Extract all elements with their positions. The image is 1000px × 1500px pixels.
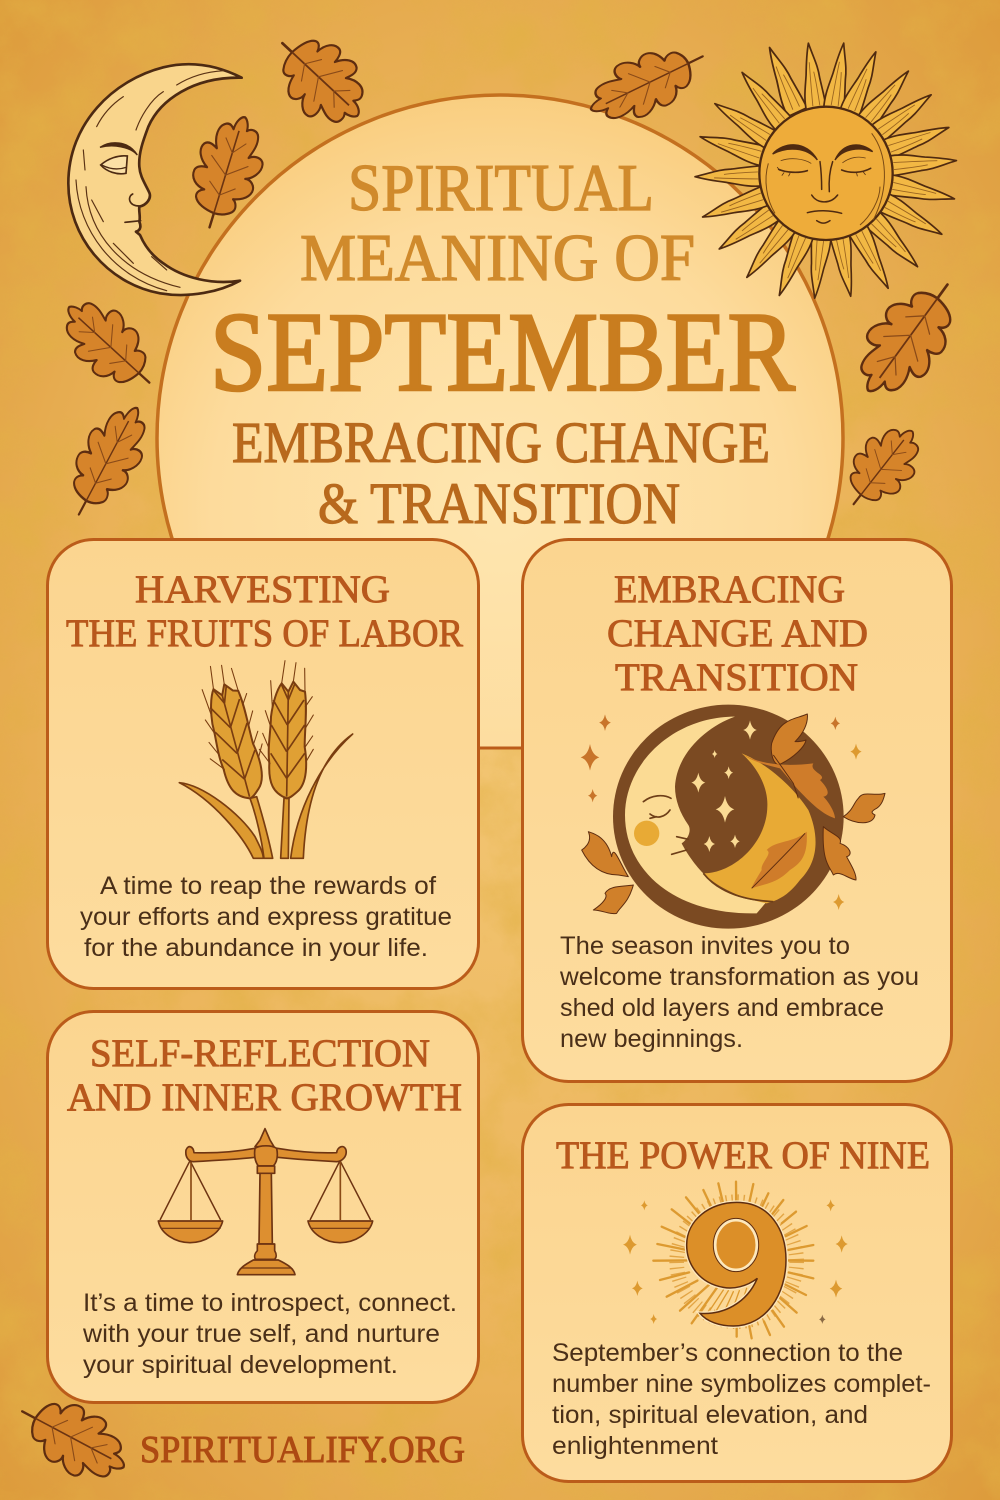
heading: THE FRUITS OF LABOR: [66, 612, 463, 655]
heading: SELF-REFLECTION: [90, 1032, 430, 1075]
icon: autumn leaf left upper: [48, 285, 170, 404]
body text: for the abundance in your life.: [84, 934, 428, 962]
body text: tion, spiritual elevation, and: [552, 1401, 868, 1429]
title: [210, 151, 796, 536]
heading: CHANGE AND: [607, 612, 868, 655]
icon: autumn leaf top left: [258, 18, 382, 141]
icon: footer leaf: [7, 1384, 139, 1494]
heading: TRANSITION: [615, 656, 858, 699]
title line: september: SEPTEMBER: [210, 290, 796, 415]
connector between panels: [479, 746, 522, 750]
panel card: [48, 1012, 478, 1402]
icon: wheat: [179, 659, 353, 858]
panel: harvesting the fruits of labor: [48, 540, 478, 988]
sun face: [759, 107, 893, 240]
icon: autumn leaf by moon: [180, 108, 275, 237]
icon: number nine with rays: [623, 1182, 848, 1338]
heading: THE POWER OF NINE: [556, 1134, 930, 1177]
body text: your spiritual development.: [83, 1351, 398, 1379]
icon: autumn leaf right lower: [831, 413, 934, 522]
body text: shed old layers and embrace: [560, 994, 884, 1022]
subtitle line: and transition: & TRANSITION: [318, 471, 680, 536]
body text: with your true self, and nurture: [82, 1320, 440, 1348]
icon: balance scales: [158, 1129, 373, 1275]
panel card: [48, 540, 478, 988]
body text: September’s connection to the: [552, 1339, 903, 1367]
icon: sun with face: [695, 42, 957, 300]
panel: embracing change and transition: [522, 540, 952, 1082]
body text: A time to reap the rewards of: [100, 872, 436, 900]
body text: [552, 1339, 931, 1460]
sun rays: [695, 42, 957, 300]
body text: enlightenment: [552, 1432, 718, 1460]
heading: EMBRACING: [614, 568, 845, 611]
panel: the power of nine: [522, 1104, 952, 1482]
body text: welcome transformation as you: [559, 963, 919, 991]
panel: self-reflection and inner growth: [48, 1012, 478, 1402]
icon: crescent moon with face: [68, 64, 242, 295]
title line: spiritual: SPIRITUAL: [348, 151, 654, 225]
body text: [559, 932, 919, 1053]
icon: autumn leaf right upper: [841, 264, 975, 412]
heading: AND INNER GROWTH: [67, 1076, 462, 1119]
title arch panel: [157, 95, 843, 781]
icon: moon with stars and leaves: [581, 705, 885, 929]
heading: [607, 568, 868, 699]
heading: [67, 1032, 462, 1119]
panel card: [522, 540, 952, 1082]
body text: The season invites you to: [560, 932, 850, 960]
body text: your efforts and express gratitue: [80, 903, 452, 931]
body text: [80, 872, 452, 962]
icon: autumn leaf top right: [579, 30, 715, 136]
title line: meaning of: MEANING OF: [300, 221, 695, 295]
footer website: SPIRITUALIFY.ORG: [140, 1429, 465, 1471]
icon: autumn leaf left lower: [54, 394, 162, 528]
heading: [66, 568, 463, 655]
body text: new beginnings.: [560, 1025, 743, 1053]
heading: HARVESTING: [135, 568, 390, 611]
panel card: [522, 1104, 952, 1482]
subtitle line: embracing change: EMBRACING CHANGE: [232, 410, 770, 475]
body text: [82, 1289, 457, 1379]
body text: It’s a time to introspect, connect.: [83, 1289, 457, 1317]
body text: number nine symbolizes complet-: [552, 1370, 931, 1398]
